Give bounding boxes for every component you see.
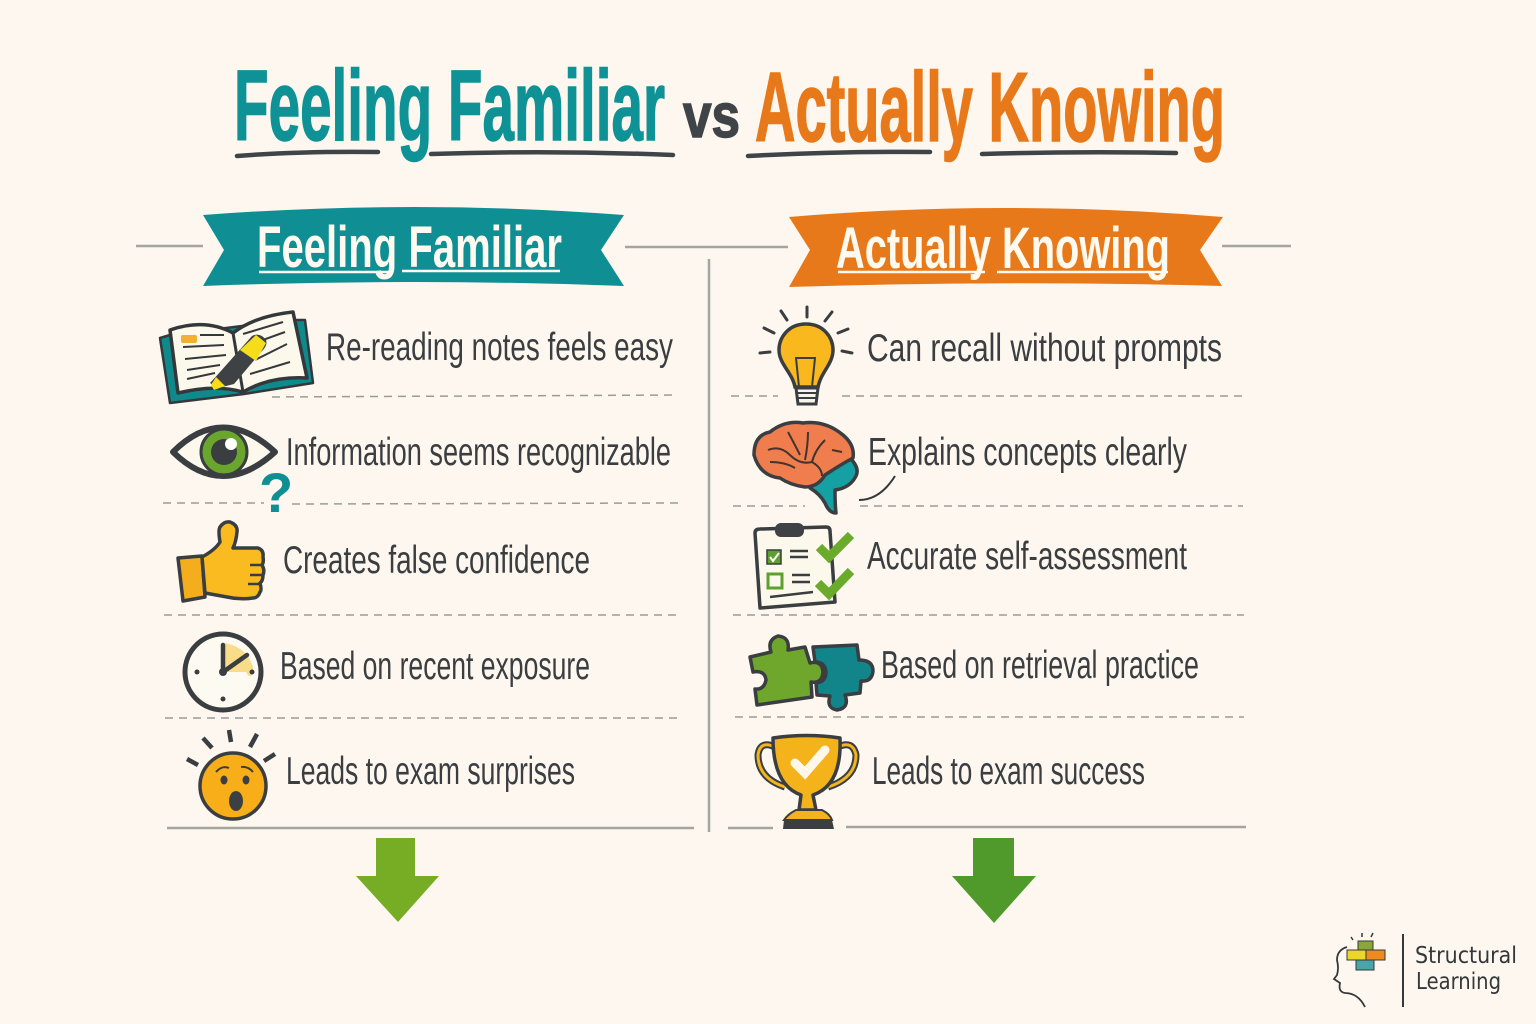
icon: light bulb — [760, 307, 852, 404]
item: exam success — [758, 736, 1145, 829]
item: exam surprises — [187, 730, 575, 819]
label: Information seems recognizable — [286, 431, 671, 474]
title: vs — [683, 82, 740, 151]
item: retrieval practice — [750, 636, 1199, 710]
logo: Structural Learning: Structural — [1415, 943, 1517, 969]
heading banner: Actually Knowing: Actually Knowing — [836, 216, 1170, 281]
item: self-assessment — [755, 523, 1187, 608]
title: Feeling Familiar — [234, 50, 665, 162]
icon: thumbs up — [178, 522, 264, 601]
panel: actually knowing — [750, 208, 1223, 829]
label: Can recall without prompts — [867, 327, 1222, 370]
arrow: right — [952, 838, 1036, 923]
item: recent exposure — [185, 634, 590, 710]
icon: puzzle pieces — [750, 636, 873, 710]
icon: trophy with check — [758, 736, 856, 829]
heading banner: Actually Knowing — [789, 208, 1223, 287]
icon: brain — [754, 422, 895, 513]
panel: feeling familiar — [160, 207, 673, 819]
label: Creates false confidence — [283, 539, 590, 582]
label: Accurate self-assessment — [867, 535, 1187, 578]
label: Based on retrieval practice — [881, 644, 1199, 687]
label: Explains concepts clearly — [868, 431, 1187, 474]
item: recall — [760, 307, 1222, 404]
heading banner: Feeling Familiar — [203, 207, 624, 286]
label: Re-reading notes feels easy — [326, 326, 673, 369]
icon: open book and highlighter — [160, 312, 313, 403]
item: false confidence — [178, 522, 590, 601]
arrow: left — [356, 838, 439, 922]
icon: surprised face — [187, 730, 275, 819]
icon: clock — [185, 634, 261, 710]
logo: Structural Learning: Learning — [1416, 969, 1501, 995]
item: explains — [754, 422, 1187, 513]
label: Based on recent exposure — [280, 645, 590, 688]
label: Leads to exam success — [872, 750, 1145, 793]
icon: clipboard with checks — [755, 523, 851, 608]
item: re-reading notes — [160, 312, 673, 403]
heading banner: Feeling Familiar: Feeling Familiar — [257, 215, 562, 280]
icon: eye with question mark: ? — [259, 461, 293, 524]
logo: Structural Learning — [1334, 933, 1517, 1007]
item: information recognizable — [173, 428, 671, 524]
label: Leads to exam surprises — [286, 750, 575, 793]
icon: eye with question mark — [173, 428, 293, 524]
